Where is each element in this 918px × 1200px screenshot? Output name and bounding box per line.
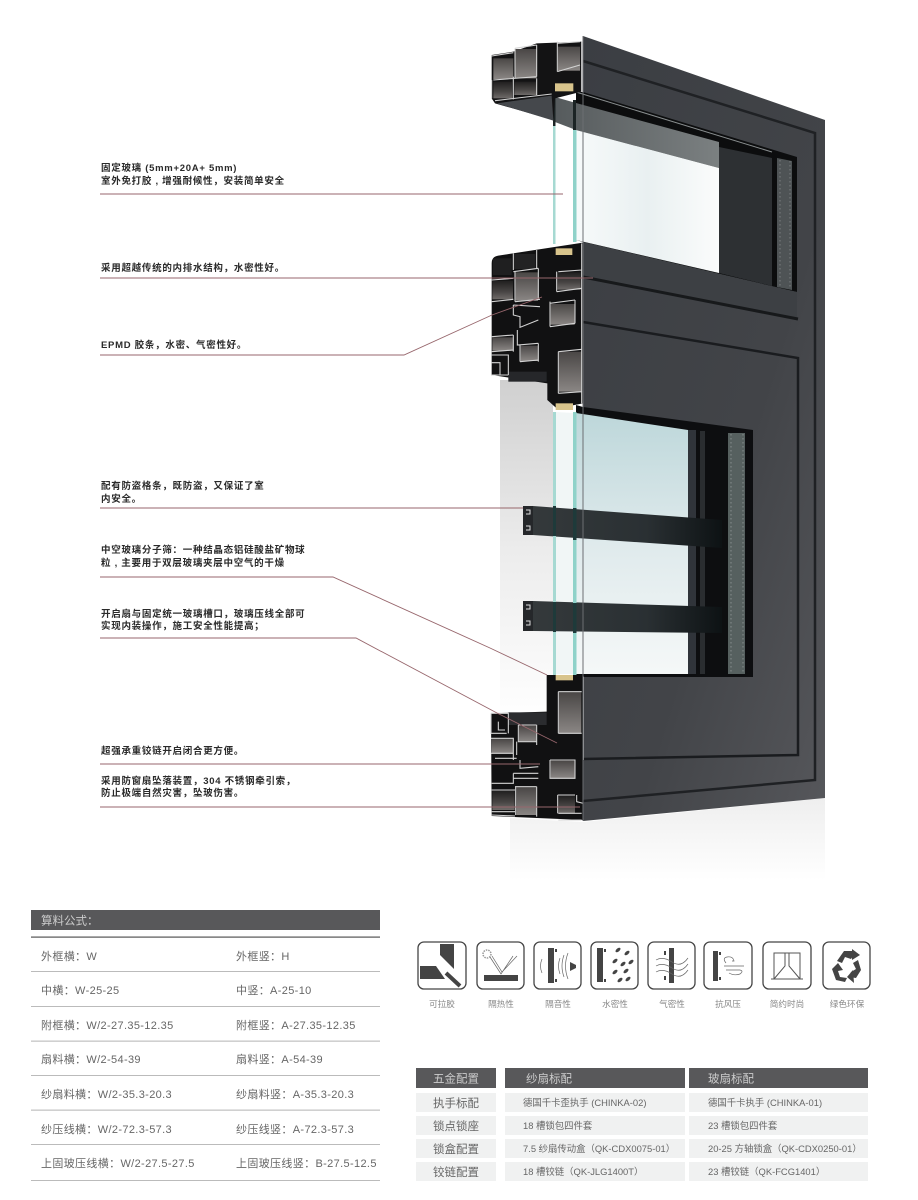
callout: fixed glass: 固定玻璃 (5mm+20A+ 5mm) — [101, 163, 237, 174]
formula rows: 上固玻压线横：W/2-27.5-27.5 — [41, 1156, 195, 1170]
formula rows: 纱扇料竖：A-35.3-20.3 — [236, 1087, 354, 1101]
callout: security bars: 内安全。 — [101, 493, 142, 505]
formula rows: 扇料横：W/2-54-39 — [41, 1052, 141, 1066]
top profile section — [492, 42, 582, 121]
formula rows: 上固玻压线竖：B-27.5-12.5 — [236, 1156, 377, 1170]
callout: molecular sieve: 中空玻璃分子筛：一种结晶态铝硅酸盐矿物球 — [101, 545, 305, 556]
callout: molecular sieve: 粒 , 主要用于双层玻璃夹层中空气的干燥 — [101, 557, 285, 569]
formula rows: 纱扇料横：W/2-35.3-20.3 — [41, 1087, 172, 1101]
floor reflection — [510, 798, 825, 880]
middle profile section — [491, 243, 583, 410]
formula rows: 中横：W-25-25 — [41, 983, 119, 997]
table rows: 18 槽铰链（QK-JLG1400T） — [523, 1166, 643, 1177]
icon: simple style: 简约时尚 — [770, 998, 804, 1009]
icon: recycling — [823, 942, 870, 1009]
table row backgrounds — [416, 1093, 868, 1181]
formula rows: 扇料竖：A-54-39 — [236, 1052, 323, 1066]
icon: water tightness: 水密性 — [602, 998, 628, 1009]
table rows: 锁点锁座 — [433, 1119, 479, 1133]
callout: EPDM strip: EPMD 胶条，水密、气密性好。 — [101, 339, 247, 351]
panel: performance icons — [418, 942, 870, 1009]
icon: sealant: 可拉胶 — [429, 998, 455, 1009]
profile edge — [582, 36, 584, 821]
formula rows: 中竖：A-25-10 — [236, 984, 312, 997]
callout: anti-fall device: 防止极端自然灾害，坠玻伤害。 — [101, 787, 244, 799]
icon: air tightness: 气密性 — [659, 998, 685, 1009]
table header: 玻扇标配 — [708, 1072, 754, 1086]
icon: recycling: 绿色环保 — [830, 998, 865, 1009]
transom grooves — [583, 242, 798, 759]
table header — [416, 1068, 868, 1088]
callout: security bars: 配有防盗格条，既防盗，又保证了室 — [101, 481, 265, 492]
table rows: 铰链配置 — [433, 1165, 479, 1179]
callout lines — [100, 194, 593, 807]
table rows: 锁盒配置 — [433, 1142, 479, 1156]
table rows: 执手标配 — [433, 1096, 479, 1110]
icon: air tightness — [648, 942, 695, 1009]
formula rows: 纱压线竖：A-72.3-57.3 — [236, 1122, 354, 1136]
table rows — [433, 1096, 862, 1179]
table rows: 18 槽锁包四件套 — [523, 1120, 593, 1131]
formula rows: 附框竖：A-27.35-12.35 — [236, 1018, 356, 1032]
bottom profile section — [491, 675, 583, 820]
table rows: 20-25 方轴锁盒（QK-CDX0250-01） — [708, 1143, 862, 1154]
icon: water tightness — [591, 942, 638, 1009]
formula rows: 外框竖：H — [236, 950, 290, 963]
background insect screen — [500, 380, 553, 720]
outer frame groove — [583, 61, 815, 801]
formula rule lines — [31, 936, 380, 1181]
icon: sound insulation: 隔音性 — [545, 998, 571, 1009]
icon: sealant — [418, 942, 466, 1009]
front frame face — [583, 36, 825, 821]
formula heading bar: 算料公式： — [41, 914, 98, 928]
table header: 五金配置 — [433, 1072, 479, 1086]
callout: hinge: 超强承重铰链开启闭合更方便。 — [101, 745, 244, 757]
security grille bars — [523, 506, 722, 633]
icon: wind pressure: 抗风压 — [715, 998, 741, 1009]
table rows: 7.5 纱扇传动盒（QK-CDX0075-01） — [523, 1143, 675, 1154]
formula heading bar — [31, 910, 380, 930]
table rows: 德国千卡歪执手 (CHINKA-02) — [523, 1097, 646, 1108]
callout: glazing slot: 开启扇与固定统一玻璃槽口，玻璃压线全部可 — [101, 609, 305, 620]
callout: drainage: 采用超越传统的内排水结构，水密性好。 — [101, 262, 285, 274]
panel: material formula table — [31, 910, 380, 1181]
formula rows — [41, 949, 377, 1170]
callout: glazing slot: 实现内装操作，施工安全性能提高； — [101, 620, 265, 632]
icon: wind pressure — [704, 942, 752, 1009]
table rows: 德国千卡执手 (CHINKA-01) — [708, 1097, 822, 1108]
callout: anti-fall device: 采用防窗扇坠落装置，304 不锈钢牵引索， — [101, 776, 296, 787]
formula rows: 外框横：W — [41, 949, 97, 963]
callout: fixed glass: 室外免打胶 , 增强耐候性，安装简单安全 — [101, 175, 285, 187]
table rows: 23 槽铰链（QK-FCG1401） — [708, 1166, 825, 1177]
window cross-section product image — [491, 36, 825, 880]
icon: simple style — [763, 942, 811, 1009]
glass panes — [553, 96, 576, 675]
formula rows: 附框横：W/2-27.35-12.35 — [41, 1018, 174, 1032]
icon: sound insulation — [534, 942, 581, 1009]
panel: hardware configuration table — [416, 1068, 868, 1181]
lower glass opening — [556, 405, 753, 677]
table header: 纱扇标配 — [526, 1072, 572, 1086]
icon: heat insulation: 隔热性 — [488, 998, 514, 1009]
upper glass opening — [555, 92, 797, 292]
formula rows: 纱压线横：W/2-72.3-57.3 — [41, 1122, 172, 1136]
icon: heat insulation — [477, 942, 524, 1009]
table rows: 23 槽锁包四件套 — [708, 1120, 778, 1131]
